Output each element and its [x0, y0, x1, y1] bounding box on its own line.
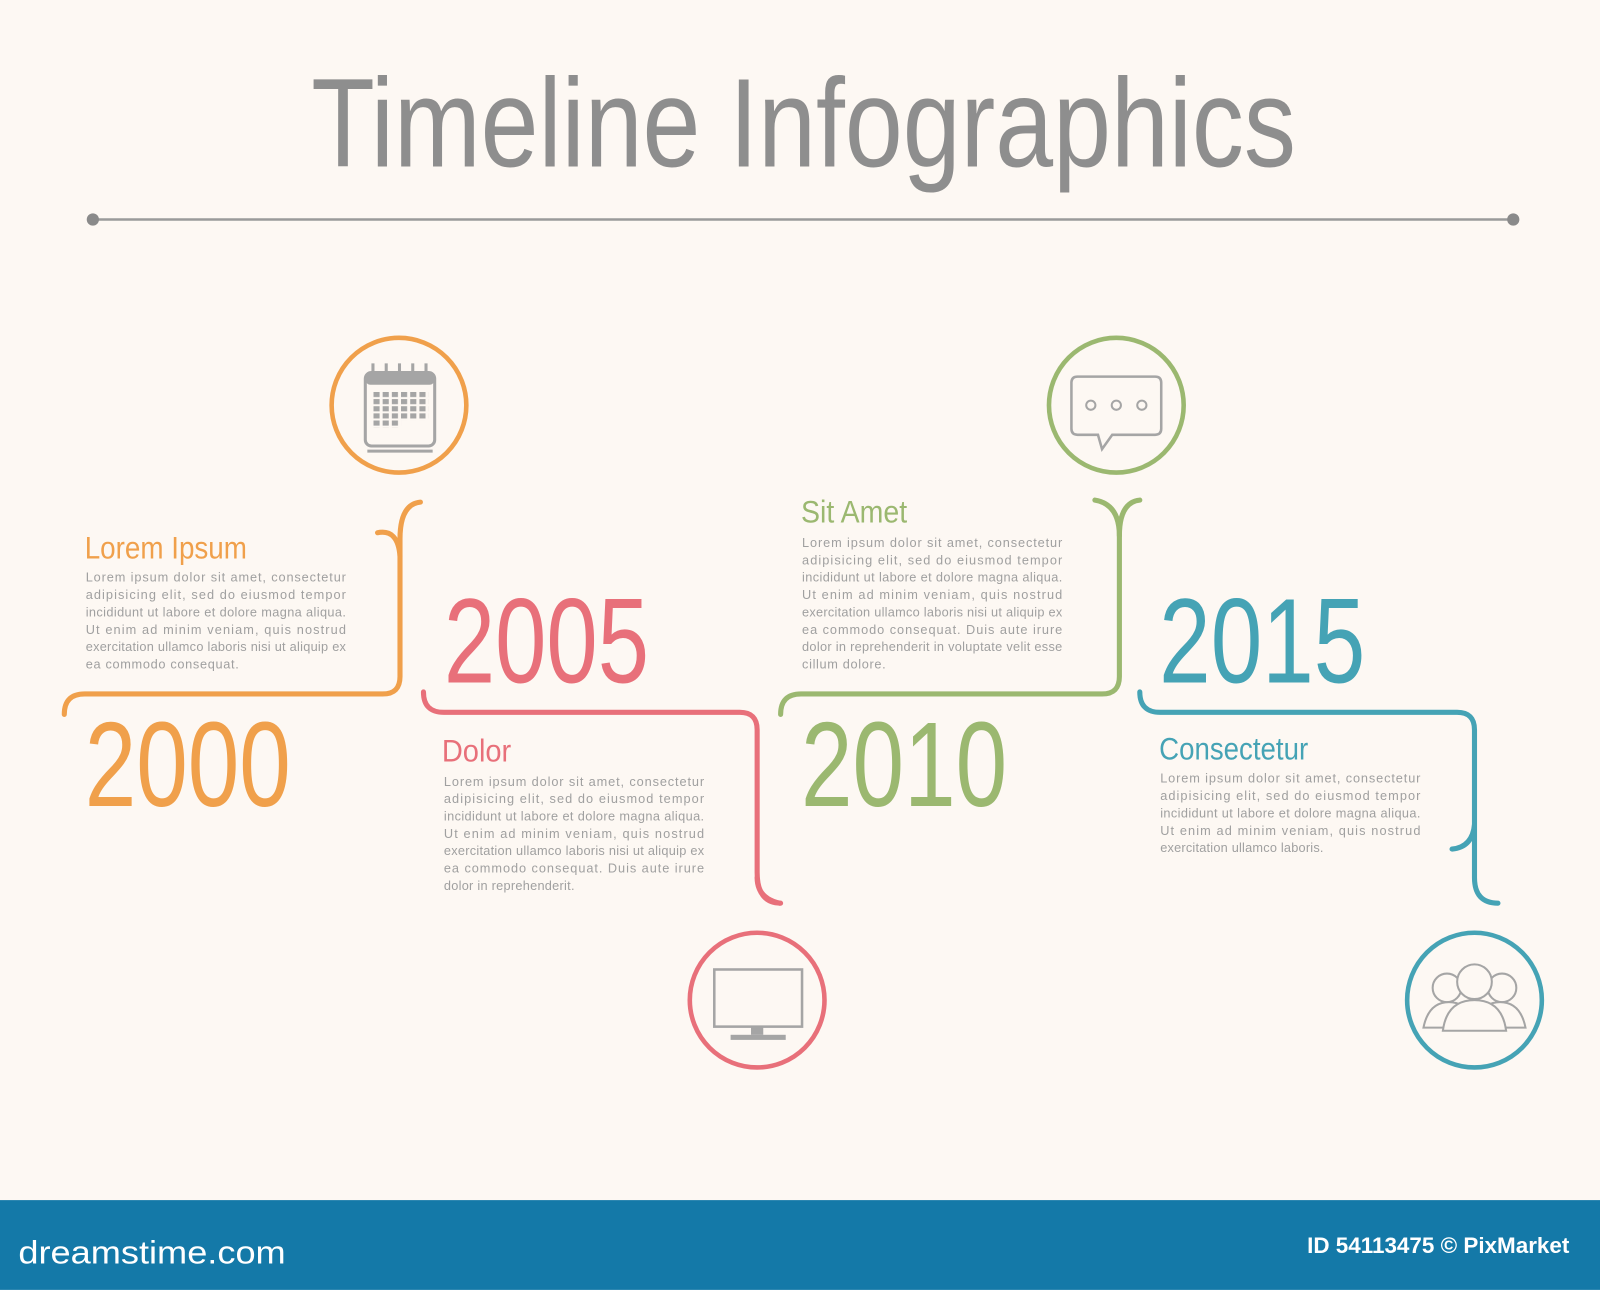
text block: Sit Amet: cillum dolore.: [802, 656, 886, 671]
text block: Lorem Ipsum: exercitation ullamco laboris nisi ut aliquip ex: [86, 639, 347, 654]
text block: Sit Amet: adipisicing elit, sed do eiusmod tempor: [802, 552, 1063, 567]
text block: Dolor: incididunt ut labore et dolore magna aliqua.: [444, 809, 704, 824]
connector: teal: [1140, 692, 1498, 903]
text block: Sit Amet: incididunt ut labore et dolore magna aliqua.: [802, 570, 1062, 585]
text block: Consectetur: Consectetur: [1159, 730, 1308, 766]
text block: Consectetur: exercitation ullamco laboris.: [1160, 840, 1323, 855]
text block: Sit Amet: Lorem ipsum dolor sit amet, consectetur: [802, 535, 1063, 550]
connector: orange: [64, 502, 420, 714]
text block: Sit Amet: exercitation ullamco laboris nisi ut aliquip ex: [802, 604, 1063, 619]
text block: Consectetur: incididunt ut labore et dolore magna aliqua.: [1160, 805, 1420, 820]
connector: green: [781, 500, 1140, 714]
title rule: [87, 213, 1519, 226]
text block: Dolor: dolor in reprehenderit.: [444, 878, 574, 893]
text block: Sit Amet: dolor in reprehenderit in voluptate velit esse: [802, 639, 1062, 654]
footer bar: [0, 1200, 1600, 1290]
year: 2015: 2015: [1159, 574, 1365, 709]
text block: Sit Amet: ea commodo consequat. Duis aute irure: [802, 622, 1062, 637]
text block: Consectetur: Ut enim ad minim veniam, quis nostrud: [1160, 823, 1420, 838]
connector: red: [423, 692, 781, 903]
year: 2000: 2000: [85, 697, 291, 832]
text block: Sit Amet: [801, 494, 1063, 671]
text block: Sit Amet: Ut enim ad minim veniam, quis nostrud: [802, 587, 1062, 602]
text block: Dolor: Lorem ipsum dolor sit amet, consectetur: [444, 774, 705, 789]
text block: Dolor: Dolor: [442, 732, 511, 768]
text block: Dolor: Ut enim ad minim veniam, quis nostrud: [444, 826, 704, 841]
footer bar: dreamstime.com: [18, 1233, 286, 1270]
text block: Lorem Ipsum: Lorem ipsum dolor sit amet, consectetur: [86, 570, 347, 585]
text block: Lorem Ipsum: Lorem Ipsum: [85, 529, 247, 565]
text block: Dolor: exercitation ullamco laboris nisi ut aliquip ex: [444, 843, 705, 858]
year: 2010: 2010: [801, 697, 1007, 832]
icon: people circle: [1407, 933, 1542, 1067]
footer bar: ID 54113475 © PixMarket: [1307, 1233, 1570, 1258]
text block: Lorem Ipsum: incididunt ut labore et dolore magna aliqua.: [86, 604, 346, 619]
icon: speech bubble circle: [1049, 338, 1184, 473]
text block: Dolor: ea commodo consequat. Duis aute irure: [444, 861, 704, 876]
text block: Consectetur: [1159, 730, 1421, 855]
text block: Lorem Ipsum: [85, 529, 347, 671]
text block: Lorem Ipsum: adipisicing elit, sed do eiusmod tempor: [86, 587, 347, 602]
text block: Dolor: adipisicing elit, sed do eiusmod tempor: [444, 791, 705, 806]
year: 2005: 2005: [444, 574, 649, 709]
title: Timeline Infographics: [311, 51, 1296, 193]
icon: monitor circle: [690, 933, 824, 1067]
icon: calendar circle: [332, 338, 466, 473]
text block: Consectetur: adipisicing elit, sed do eiusmod tempor: [1160, 788, 1421, 803]
text block: Lorem Ipsum: ea commodo consequat.: [86, 656, 239, 671]
text block: Lorem Ipsum: Ut enim ad minim veniam, quis nostrud: [86, 622, 346, 637]
text block: Sit Amet: Sit Amet: [801, 494, 907, 530]
text block: Dolor: [442, 732, 705, 893]
text block: Consectetur: Lorem ipsum dolor sit amet, consectetur: [1160, 771, 1421, 786]
